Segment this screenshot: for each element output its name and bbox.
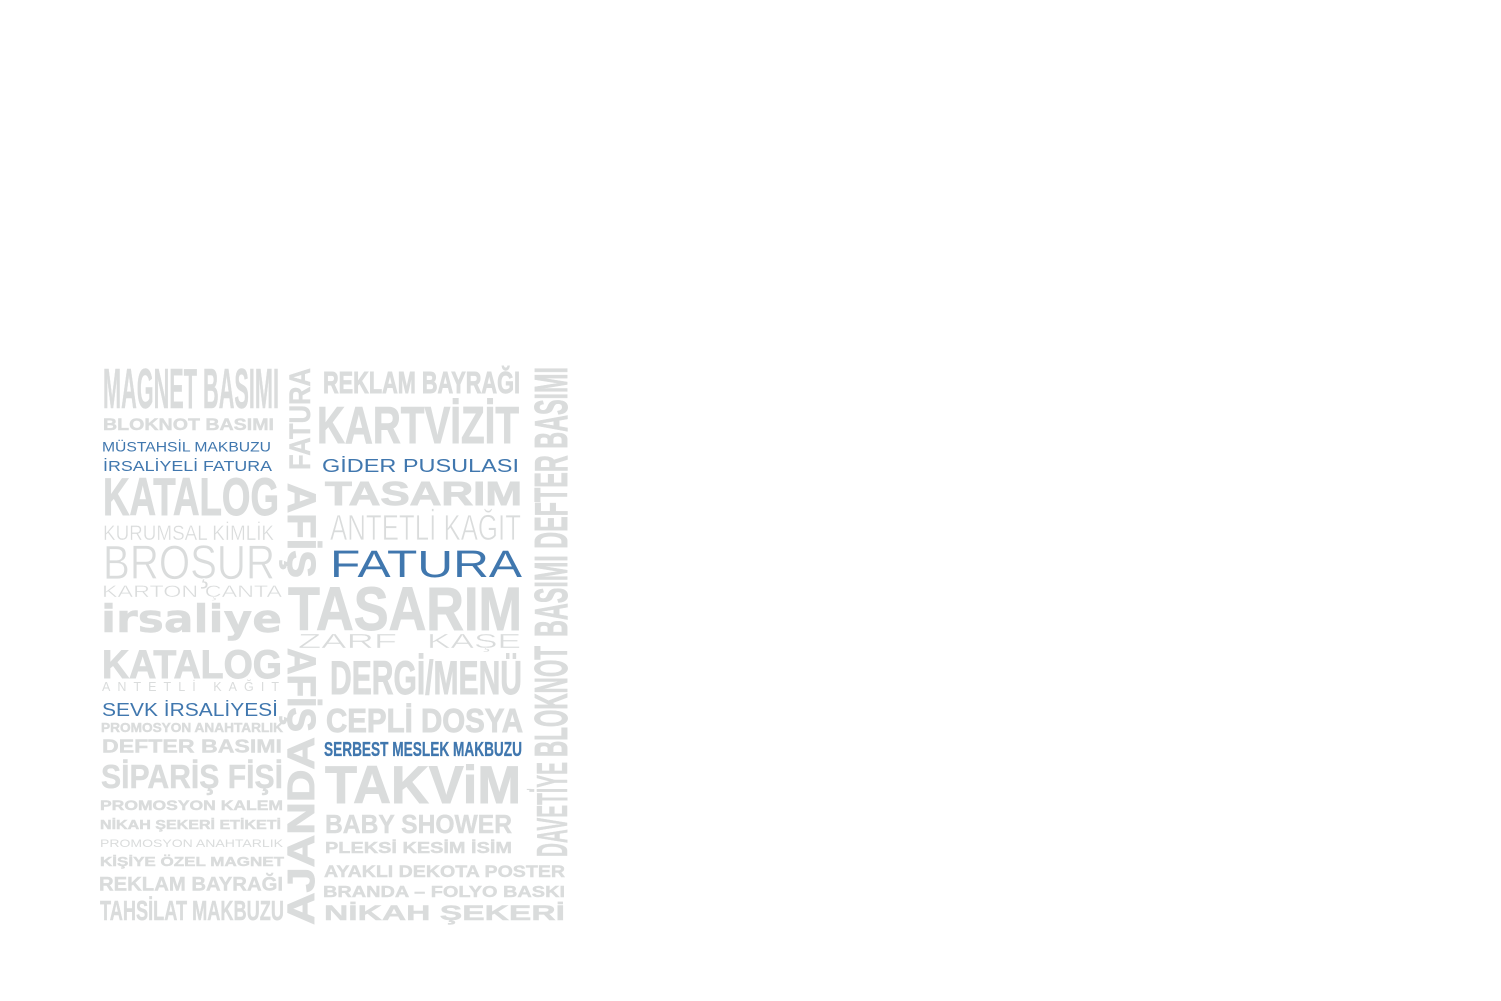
word: cepli dosya: CEPLİ DOSYA: [326, 702, 523, 739]
vertical words column right: DAVETİYE: [528, 762, 577, 857]
word: broşur: BROŞUR: [103, 537, 275, 590]
word: reklam bayrağı left: REKLAM BAYRAĞI: [99, 872, 283, 896]
word: dash: -: [526, 780, 532, 796]
word: irsaliye: irsaliye: [101, 597, 282, 641]
word cloud: MAGNET BASIMI: [103, 357, 279, 421]
word: baby shower: BABY SHOWER: [325, 809, 512, 839]
word: bloknot basimi: BLOKNOT BASIMI: [103, 416, 274, 434]
word: müstahsil makbuzu: MÜSTAHSİL MAKBUZU: [102, 440, 271, 454]
word: antetli kağıt thin: ANTETLİ KAĞIT: [330, 507, 521, 548]
vertical words column left: [279, 368, 323, 925]
word cloud: [99, 357, 577, 926]
word: kaşe: KAŞE: [427, 631, 521, 653]
vertical words column right: [525, 367, 577, 857]
word: ayaklı dekota poster: AYAKLI DEKOTA POSTER: [324, 863, 565, 881]
word: fatura highlight: FATURA: [330, 544, 523, 586]
word: irsaliyeli fatura: İRSALİYELİ FATURA: [103, 457, 272, 475]
vertical words column right: BLOKNOT: [525, 646, 577, 757]
word: nikah şekeri etiketi: NİKAH ŞEKERİ ETİKETİ: [100, 817, 281, 832]
left column of words: [99, 357, 284, 926]
word: dergi/menü: DERGİ/MENÜ: [330, 651, 522, 704]
word: katalog small: KATALOG: [102, 643, 282, 687]
word: afiş lower vertical: AFİŞ: [279, 648, 323, 732]
word: katalog large: KATALOG: [103, 468, 279, 527]
word: takvim: TAKViM: [325, 756, 521, 815]
word: pleksi kesim isim: PLEKSİ KESİM İSİM: [325, 839, 512, 857]
word: karton çanta: KARTON ÇANTA: [102, 583, 282, 601]
word: promosyon kalem: PROMOSYON KALEM: [100, 797, 283, 813]
word: kurumsal kimlik: KURUMSAL KİMLİK: [103, 522, 274, 545]
center column of words: [288, 365, 565, 925]
word: defter basimi: DEFTER BASIMI: [102, 736, 282, 756]
word: branda folyo baskı: BRANDA – FOLYO BASKI: [323, 884, 565, 901]
word: zarf: ZARF: [298, 631, 397, 653]
word: gider pusulası: GİDER PUSULASI: [322, 456, 519, 476]
word: kartvizit: KARTVİZİT: [317, 397, 519, 455]
word: afiş upper vertical: AFİŞ: [279, 483, 323, 578]
word: fatura vertical: FATURA: [284, 368, 317, 470]
word: nikah şekeri: NİKAH ŞEKERİ: [324, 902, 565, 925]
word: basimi defter basimi vertical: BASIMI DEFTER BASIMI: [525, 367, 577, 637]
word: promosyon anahtarlik regular: PROMOSYON ANAHTARLIK: [100, 838, 284, 850]
word: promosyon anahtarlik bold: PROMOSYON ANAHTARLIK: [101, 721, 283, 735]
word: ajanda vertical: AJANDA: [281, 737, 323, 925]
word: sevk irsaliyesi: SEVK İRSALİYESİ: [102, 699, 278, 720]
word: tahsilat makbuzu: TAHSİLAT MAKBUZU: [100, 895, 284, 926]
word: serbest meslek makbuzu: SERBEST MESLEK MAKBUZU: [324, 739, 522, 761]
word: sipariş fişi: SİPARİŞ FİŞİ: [101, 758, 283, 795]
word: kişiye özel magnet: KİŞİYE ÖZEL MAGNET: [100, 854, 284, 869]
word: tasarım large: TASARIM: [288, 575, 522, 643]
word: tasarım wide: TASARIM: [325, 475, 522, 512]
word: reklam bayrağı top: REKLAM BAYRAĞI: [323, 365, 520, 400]
word: antetli kağıt small: ANTETLİ KAĞIT: [102, 679, 279, 694]
